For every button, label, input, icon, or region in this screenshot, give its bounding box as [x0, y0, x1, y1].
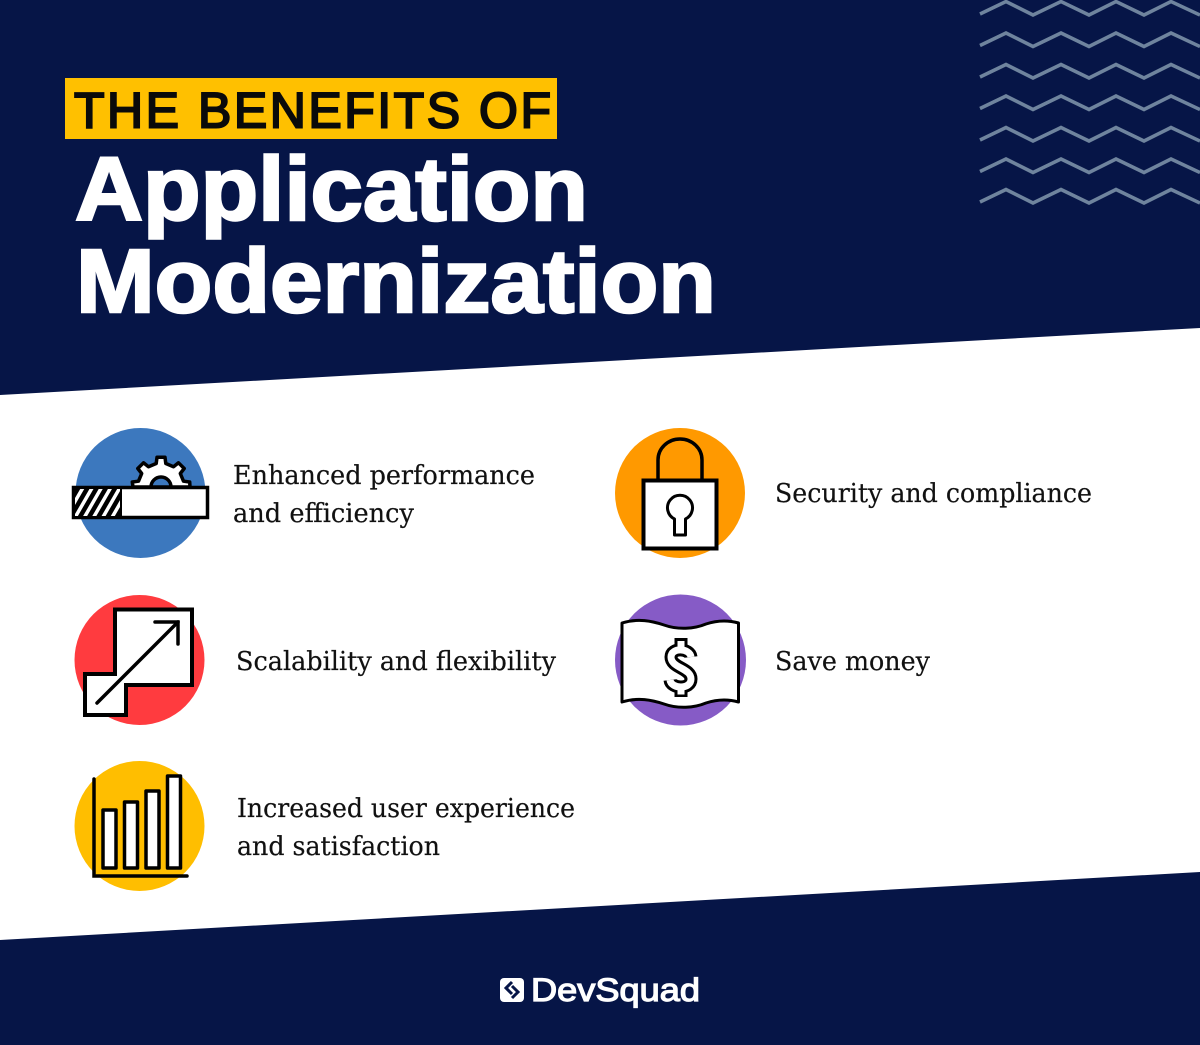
- benefit: user experience: [74, 761, 575, 891]
- icon: gear on progress bar: [74, 428, 208, 558]
- benefit: save money: [615, 594, 930, 726]
- title: application modernization: Modernization: [76, 232, 716, 332]
- title: application modernization: [75, 140, 716, 332]
- icon: logo mark: [500, 978, 524, 1002]
- title: application modernization: Application: [75, 140, 588, 240]
- zigzag decoration: [980, 2, 1200, 203]
- icon: scaling arrow: [74, 595, 204, 725]
- icon: bar chart: [74, 761, 204, 891]
- benefit: scalability: [74, 595, 556, 725]
- label: user experience: Increased user experience: [237, 794, 575, 824]
- benefit: performance: [74, 428, 535, 558]
- benefit: security: [615, 428, 1092, 558]
- icon: dollar bill: [615, 594, 746, 726]
- label: security: Security and compliance: [775, 479, 1092, 509]
- label: user experience: and satisfaction: [237, 832, 440, 862]
- label: scalability: Scalability and flexibility: [236, 647, 556, 677]
- white content band: [0, 328, 1200, 940]
- label: enhanced performance: [233, 461, 535, 529]
- label: enhanced performance: and efficiency: [233, 499, 414, 529]
- icon: padlock: [615, 428, 745, 558]
- label: user experience: [237, 794, 575, 862]
- label: enhanced performance: Enhanced performance: [233, 461, 535, 491]
- logo: DevSquad: [500, 972, 700, 1008]
- wordmark: DevSquad: [531, 972, 700, 1008]
- label: save money: Save money: [775, 647, 930, 677]
- heading: the benefits of: THE BENEFITS OF: [74, 82, 551, 138]
